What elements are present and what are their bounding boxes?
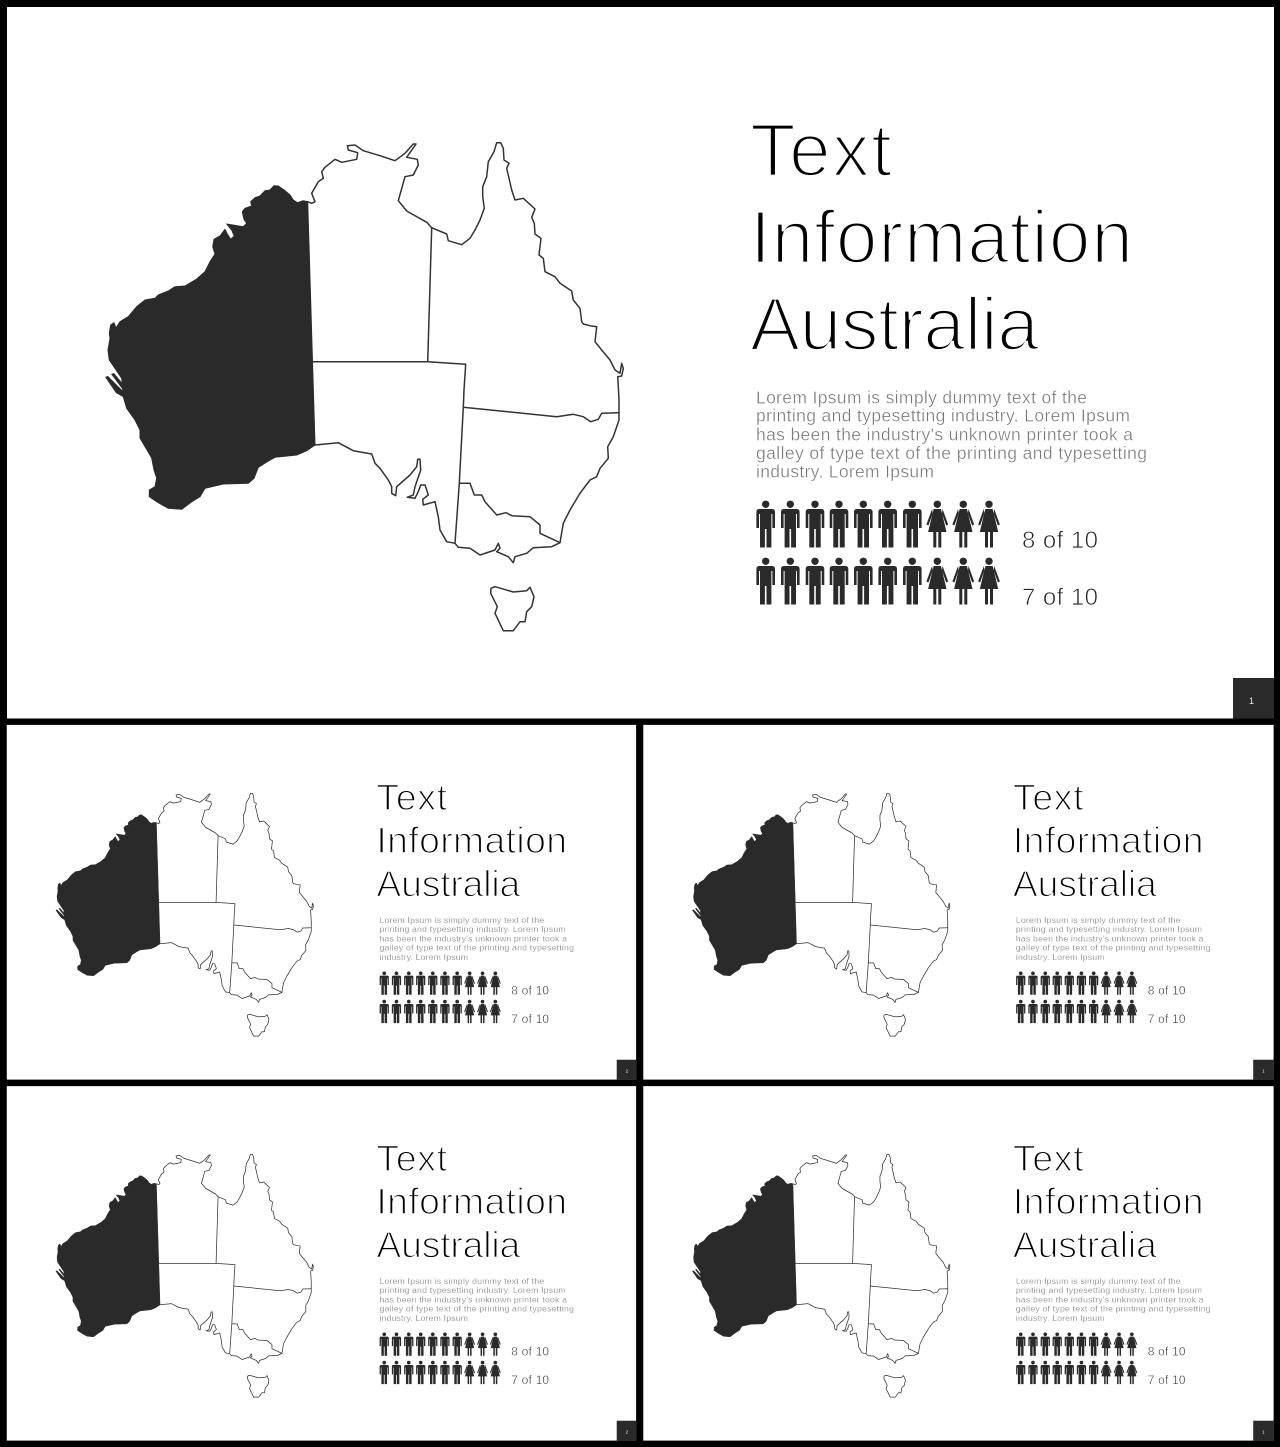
title: Information [1013,1180,1203,1222]
page number badge [617,1060,636,1080]
page number badge [617,1421,636,1441]
panel: slide thumbnail top right [643,725,1274,1080]
title: Australia [1013,863,1157,905]
pictogram row: 7 of 10: 7 of 10 [511,1012,549,1026]
pictogram row: 7 of 10 [1016,1361,1186,1387]
title: Text [750,108,892,192]
pictogram row: 8 of 10 [1016,971,1186,998]
body text: industry. Lorem Ipsum [379,952,468,962]
title: Australia [376,1224,520,1266]
body text: Lorem Ipsum is simply dummy text of the [1016,915,1181,925]
body text: galley of type text of the printing and typesetting [379,1304,574,1314]
title [376,1137,567,1266]
page number badge [1253,1421,1274,1441]
body text: printing and typesetting industry. Lorem Ipsum [756,406,1130,426]
body text: Lorem Ipsum is simply dummy text of the [1016,1276,1181,1286]
title: Text [1013,776,1084,818]
pictogram row: 7 of 10: 7 of 10 [1148,1373,1186,1387]
body text: Lorem Ipsum is simply dummy text of the [756,387,1087,407]
pictogram row: 8 of 10: 8 of 10 [511,984,549,998]
pictogram row: 7 of 10 [1016,1000,1186,1026]
body text: has been the industry's unknown printer took a [1016,934,1204,944]
title [376,776,567,905]
pictogram row: 7 of 10: 7 of 10 [1022,584,1098,611]
page number badge: 2 [626,1069,629,1074]
page number badge: 1 [1249,696,1254,706]
body text: galley of type text of the printing and typesetting [756,443,1147,463]
map: Australia [692,793,950,1036]
title [1013,776,1203,905]
body text: industry. Lorem Ipsum [379,1313,468,1323]
page number badge [1233,678,1274,718]
pictogram row: 7 of 10 [380,1361,549,1387]
title [750,108,1133,366]
pictogram row: 7 of 10: 7 of 10 [1148,1012,1186,1026]
panel: slide thumbnail bottom left [7,1086,636,1441]
body text: printing and typesetting industry. Lorem Ipsum [379,1285,565,1295]
page number badge: 1 [1262,1430,1265,1435]
title: Text [376,1137,448,1179]
title: Australia [750,282,1039,366]
body text: galley of type text of the printing and typesetting [1016,1304,1211,1314]
map: Australia [692,1154,950,1397]
title: Text [1013,1137,1084,1179]
pictogram row: 8 of 10 [1016,1332,1186,1359]
body text: galley of type text of the printing and typesetting [379,943,574,953]
body text: industry. Lorem Ipsum [1016,1313,1104,1323]
pictogram row: 8 of 10 [380,1332,549,1359]
page number badge [1253,1060,1274,1080]
body text [379,1276,574,1323]
body text: printing and typesetting industry. Lorem Ipsum [1016,1285,1202,1295]
page number badge: 2 [626,1430,629,1435]
title: Information [750,195,1133,279]
body text: has been the industry's unknown printer took a [756,424,1133,444]
title: Information [376,1180,567,1222]
body text: Lorem Ipsum is simply dummy text of the [379,915,544,925]
title: Information [376,819,567,861]
body text: galley of type text of the printing and typesetting [1016,943,1211,953]
pictogram row: 8 of 10 [380,971,549,998]
map: Australia [56,1154,313,1397]
map: Australia [56,793,313,1036]
body text: printing and typesetting industry. Lorem Ipsum [379,924,565,934]
body text: industry. Lorem Ipsum [1016,952,1104,962]
pictogram row: 8 of 10 [756,501,1098,554]
body text: has been the industry's unknown printer took a [379,1295,567,1305]
body text: printing and typesetting industry. Lorem Ipsum [1016,924,1202,934]
title [1013,1137,1203,1266]
body text: has been the industry's unknown printer took a [1016,1295,1204,1305]
pictogram row: 7 of 10 [380,1000,549,1026]
body text [756,387,1147,482]
body text [1016,1276,1211,1323]
page number badge: 1 [1262,1069,1265,1074]
title: Information [1013,819,1203,861]
body text [1016,915,1211,962]
body text [379,915,574,962]
pictogram row: 8 of 10: 8 of 10 [1022,527,1098,554]
pictogram row: 8 of 10: 8 of 10 [1148,1345,1186,1359]
body text: has been the industry's unknown printer took a [379,934,567,944]
panel: slide thumbnail bottom right [643,1086,1274,1441]
pictogram row: 8 of 10: 8 of 10 [511,1345,549,1359]
title: Australia [1013,1224,1157,1266]
panel: slide thumbnail top left [7,725,636,1080]
body text: industry. Lorem Ipsum [756,462,934,482]
pictogram row: 7 of 10 [756,558,1098,611]
title: Text [376,776,448,818]
pictogram row: 8 of 10: 8 of 10 [1148,984,1186,998]
panel: main slide [7,7,1274,718]
map: Australia with Western Australia highlighted [105,143,623,631]
title: Australia [376,863,520,905]
pictogram row: 7 of 10: 7 of 10 [511,1373,549,1387]
body text: Lorem Ipsum is simply dummy text of the [379,1276,544,1286]
